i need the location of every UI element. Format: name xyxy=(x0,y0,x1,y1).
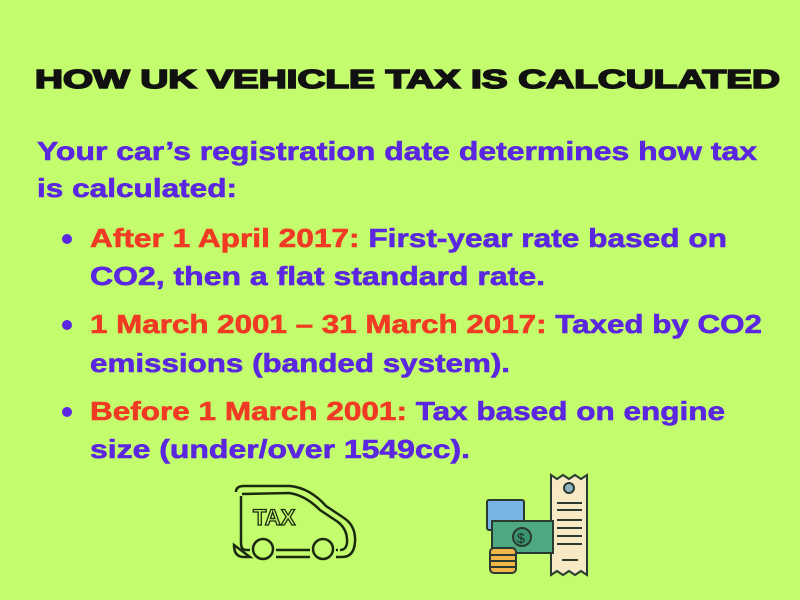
intro text xyxy=(37,136,758,203)
intro text: is calculated: xyxy=(37,173,237,203)
bullet: before 2001 xyxy=(62,396,725,464)
bullet: before 2001: size (under/over 1549cc). xyxy=(90,434,470,464)
icon: money and receipt xyxy=(487,475,587,575)
icon: money and receipt: $ xyxy=(517,530,525,546)
bullet: after 2017 xyxy=(62,223,727,291)
bullet: 2001-2017 xyxy=(62,309,762,378)
bullet: before 2001: Before 1 March 2001: Tax based on engine xyxy=(90,396,725,426)
bullet: 2001-2017: emissions (banded system). xyxy=(90,348,510,378)
bullet: after 2017: After 1 April 2017: First-year rate based on xyxy=(90,223,727,253)
icon: tax car xyxy=(234,486,355,559)
title: HOW UK VEHICLE TAX IS CALCULATED xyxy=(35,64,780,94)
icon: tax car: TAX xyxy=(253,505,296,530)
bullet: 2001-2017: 1 March 2001 – 31 March 2017: Taxed by CO2 xyxy=(90,309,762,339)
bullet: after 2017: CO2, then a flat standard rate. xyxy=(90,261,545,291)
intro text: Your car’s registration date determines how tax xyxy=(37,136,758,166)
